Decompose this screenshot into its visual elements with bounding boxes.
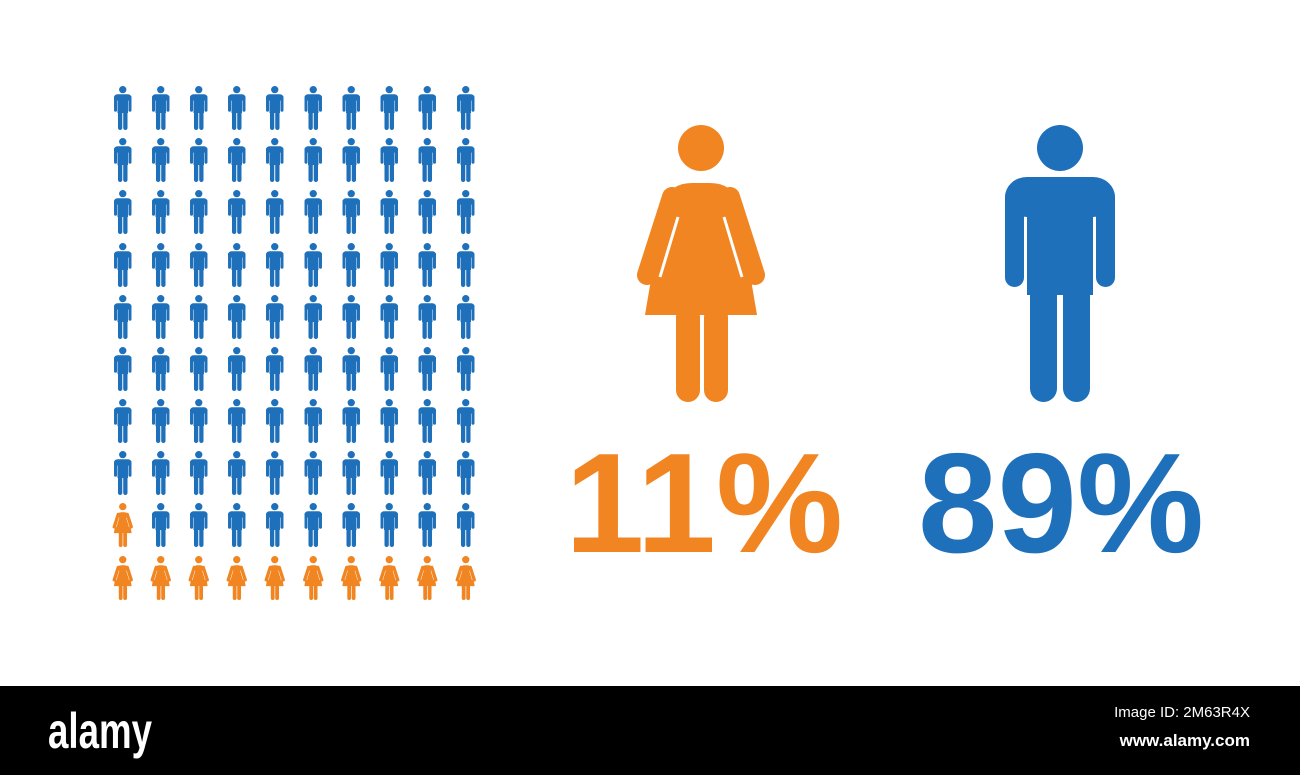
website: www.alamy.com: [1119, 731, 1250, 750]
image id: Image ID: 2M63R4X: [1114, 704, 1250, 721]
men percentage: 89%: [918, 424, 1204, 583]
footer bar: [0, 686, 1300, 775]
women percentage: 11%: [565, 424, 843, 583]
icon: large woman: [645, 125, 757, 402]
footer logo: alamy: [48, 703, 152, 759]
icon: large man: [1005, 125, 1115, 402]
icon grid: 100 people: [114, 86, 475, 600]
